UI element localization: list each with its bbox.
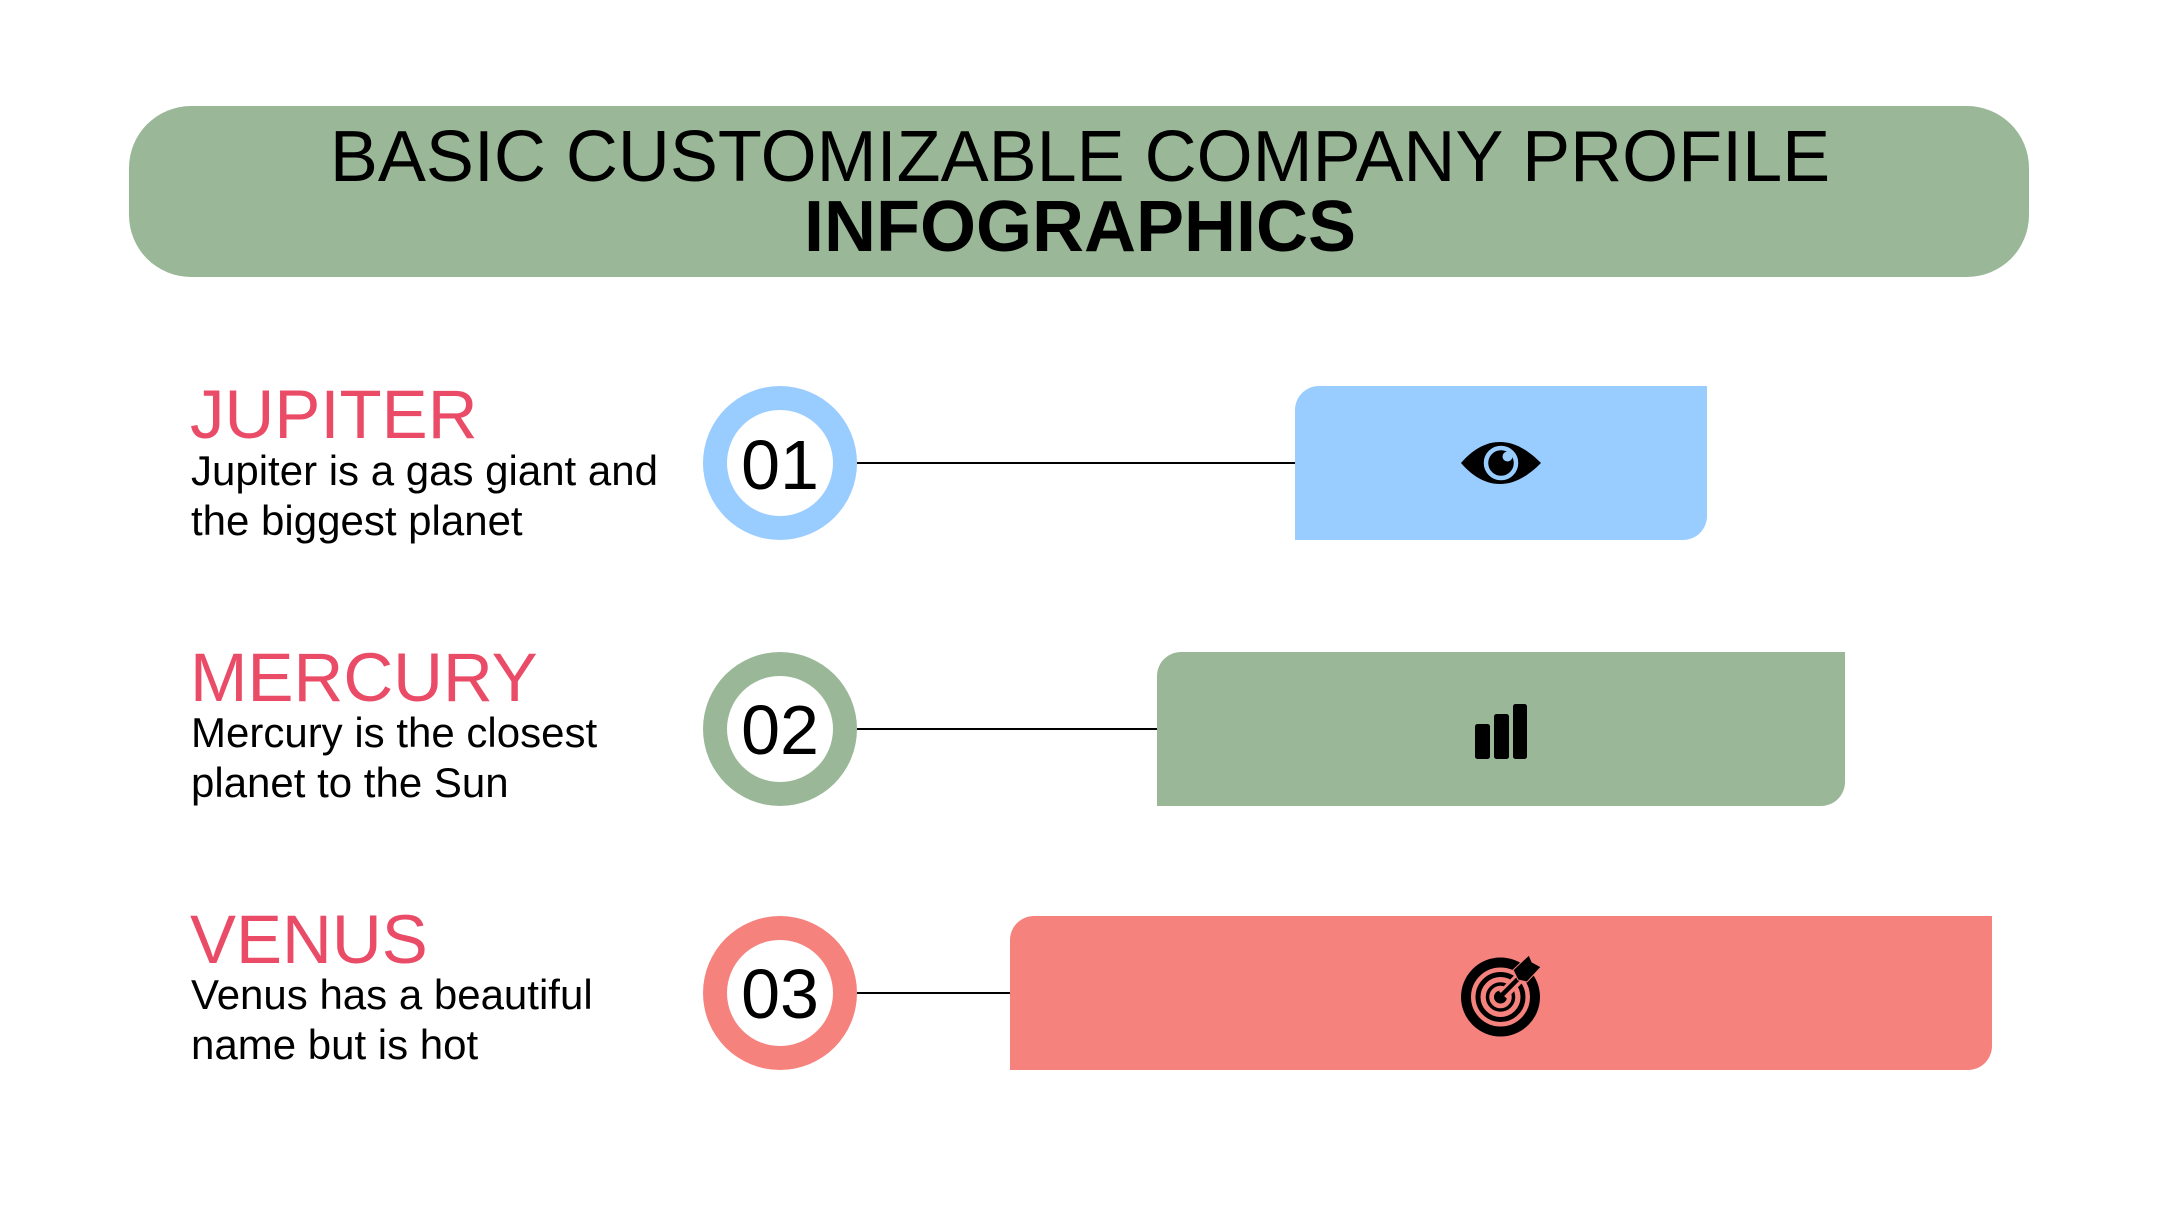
number badge 02	[703, 652, 857, 806]
icon: eye	[1461, 442, 1541, 484]
panel: Jupiter text: Jupiter is a gas giant and	[191, 447, 658, 494]
number badge 03: 03	[741, 955, 819, 1033]
connector 02	[857, 728, 1157, 730]
panel: Venus text	[190, 901, 593, 1068]
number badge 01: 01	[741, 426, 819, 504]
panel: Mercury text: Mercury is the closest	[191, 709, 597, 756]
connector 03	[857, 992, 1010, 994]
panel: Mercury text: planet to the Sun	[191, 759, 509, 806]
panel: Mercury text: MERCURY	[190, 639, 538, 716]
number badge 03	[703, 916, 857, 1070]
icon: bar chart	[1475, 704, 1527, 759]
panel: Venus text: name but is hot	[191, 1021, 478, 1068]
number badge 02: 02	[741, 691, 819, 769]
title	[330, 117, 1830, 267]
panel: Venus text: VENUS	[190, 901, 428, 978]
bar: Jupiter	[1295, 386, 1707, 540]
bar: Mercury	[1157, 652, 1845, 806]
number badge 01	[703, 386, 857, 540]
icon: target with arrow	[1461, 956, 1540, 1036]
panel: Venus text: Venus has a beautiful	[191, 971, 593, 1018]
connector 01	[857, 462, 1296, 464]
panel: Jupiter text	[190, 376, 658, 544]
title banner	[129, 106, 2029, 277]
bar: Venus	[1010, 916, 1992, 1070]
panel: Jupiter text: the biggest planet	[191, 497, 523, 544]
title: INFOGRAPHICS	[804, 187, 1356, 267]
title: BASIC CUSTOMIZABLE COMPANY PROFILE	[330, 117, 1830, 197]
panel: Mercury text	[190, 639, 597, 806]
panel: Jupiter text: JUPITER	[190, 376, 478, 453]
